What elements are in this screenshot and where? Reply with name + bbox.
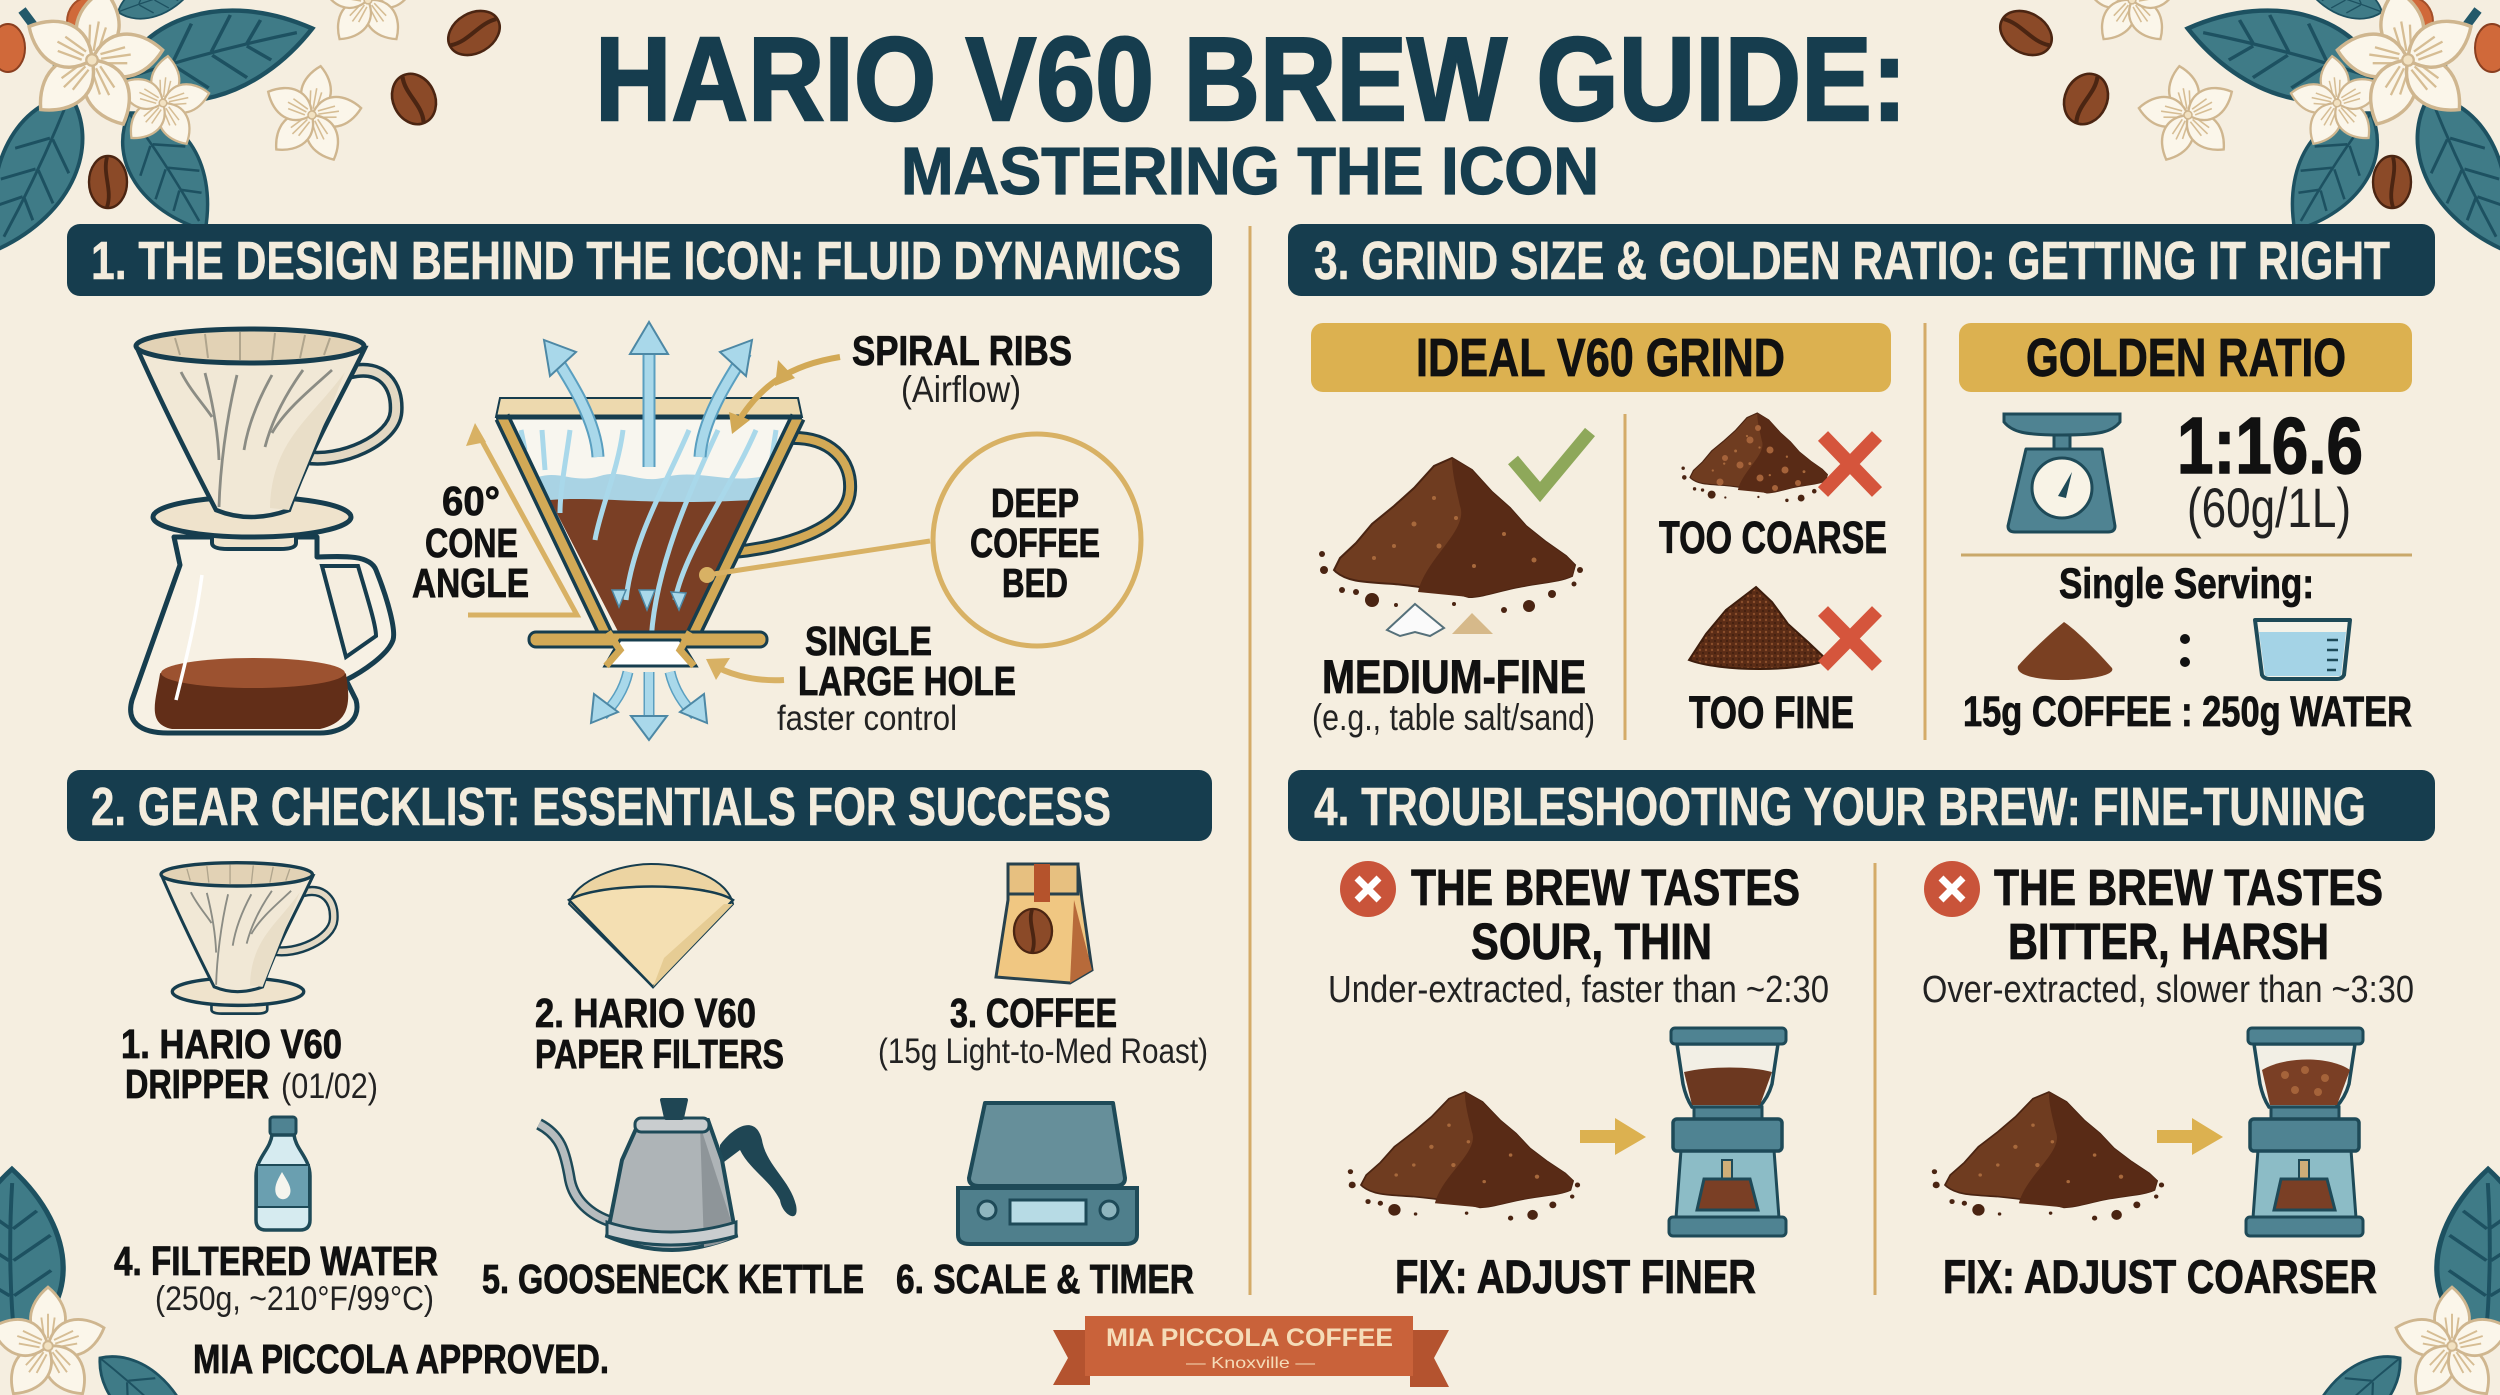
problem: bitter and harsh bbox=[1922, 859, 2414, 1303]
decoration: top-right coffee branch bbox=[1992, 0, 2500, 265]
gear: dripper bbox=[121, 863, 378, 1107]
ribbon: brand badge bbox=[1053, 1316, 1449, 1387]
panel: grind size and golden ratio bbox=[1288, 224, 2435, 740]
problem: sour and thin: FIX: ADJUST FINER bbox=[1395, 1250, 1756, 1303]
callout: deep coffee bed: BED bbox=[1002, 560, 1068, 606]
callout: 60 degree cone angle bbox=[412, 423, 577, 615]
ribbon: brand badge: — Knoxville — bbox=[1186, 1355, 1315, 1372]
subheading: golden ratio: GOLDEN RATIO bbox=[2026, 328, 2346, 388]
text: single serving bbox=[1963, 560, 2412, 736]
text: approved note: MIA PICCOLA APPROVED. bbox=[193, 1336, 609, 1382]
callout: 60 degree cone angle: ANGLE bbox=[412, 560, 529, 606]
stat: ratio bbox=[2177, 401, 2363, 539]
grind: medium-fine: (e.g., table salt/sand) bbox=[1312, 697, 1595, 738]
callout: 60 degree cone angle: 60° bbox=[442, 478, 500, 524]
heading bar: section 1 bbox=[67, 224, 1212, 296]
gear: coffee bag bbox=[878, 864, 1208, 1071]
heading bar: section 1: 1. THE DESIGN BEHIND THE ICON: FLUID DYNAMICS bbox=[91, 231, 1181, 291]
stat: ratio: 1:16.6 bbox=[2177, 401, 2363, 490]
panel: troubleshooting bbox=[1288, 770, 2435, 1303]
gear: dripper: (01/02) bbox=[281, 1067, 378, 1106]
diagram: V60 cross-section bbox=[496, 322, 850, 740]
problem: sour and thin: Under-extracted, faster than ~2:30 bbox=[1328, 969, 1829, 1011]
callout: spiral ribs: SPIRAL RIBS bbox=[852, 327, 1072, 374]
icon: balance scale bbox=[2004, 414, 2120, 532]
title: HARIO V60 BREW GUIDE: bbox=[595, 13, 1907, 146]
decoration: bottom-left coffee branch bbox=[0, 1168, 214, 1395]
gear: gooseneck kettle: 5. GOOSENECK KETTLE bbox=[482, 1256, 864, 1302]
grind: too coarse bbox=[1659, 413, 1887, 563]
gear: dripper: 1. HARIO V60 bbox=[121, 1021, 342, 1067]
gear: gooseneck kettle bbox=[482, 1100, 864, 1302]
grind: medium-fine: MEDIUM-FINE bbox=[1322, 650, 1586, 703]
decoration: bottom-right coffee branch bbox=[2286, 1168, 2500, 1395]
callout: single large hole: SINGLE bbox=[805, 618, 932, 664]
subheading: ideal grind: IDEAL V60 GRIND bbox=[1416, 328, 1785, 388]
gear: coffee bag: (15g Light-to-Med Roast) bbox=[878, 1032, 1208, 1071]
text: single serving: Single Serving: bbox=[2059, 560, 2314, 608]
gear: paper filters: 2. HARIO V60 bbox=[535, 990, 756, 1036]
problem: sour and thin: SOUR, THIN bbox=[1471, 913, 1712, 970]
gear: dripper: DRIPPER bbox=[125, 1061, 269, 1107]
gear: filtered water: (250g, ~210°F/99°C) bbox=[155, 1280, 434, 1318]
heading bar: section 2: 2. GEAR CHECKLIST: ESSENTIALS FOR SUCCESS bbox=[91, 777, 1111, 837]
grind: medium-fine bbox=[1312, 432, 1595, 738]
gear: coffee bag: 3. COFFEE bbox=[950, 990, 1117, 1036]
icon: dripper on server bbox=[131, 329, 396, 733]
gear: paper filters bbox=[535, 864, 784, 1077]
callout: spiral ribs bbox=[729, 327, 1072, 434]
stat: ratio: (60g/1L) bbox=[2187, 476, 2351, 539]
problem: bitter and harsh: BITTER, HARSH bbox=[2008, 913, 2329, 970]
problem: bitter and harsh: THE BREW TASTES bbox=[1994, 859, 2383, 916]
panel: design behind the icon bbox=[67, 224, 1212, 740]
decoration: top-left coffee branch bbox=[0, 0, 508, 265]
callout: deep coffee bed: COFFEE bbox=[970, 520, 1100, 566]
gear: filtered water: 4. FILTERED WATER bbox=[114, 1238, 438, 1284]
grind: too fine: TOO FINE bbox=[1689, 687, 1854, 738]
problem: sour and thin: THE BREW TASTES bbox=[1411, 859, 1800, 916]
callout: deep coffee bed bbox=[699, 434, 1141, 646]
subtitle: MASTERING THE ICON bbox=[901, 134, 1599, 209]
gear: filtered water bbox=[114, 1117, 438, 1318]
callout: 60 degree cone angle: CONE bbox=[425, 520, 518, 566]
gear: paper filters: PAPER FILTERS bbox=[535, 1031, 784, 1077]
callout: deep coffee bed: DEEP bbox=[991, 480, 1079, 526]
ribbon: brand badge: MIA PICCOLA COFFEE bbox=[1106, 1324, 1393, 1352]
problem: bitter and harsh: Over-extracted, slower than ~3:30 bbox=[1922, 969, 2414, 1011]
problem: bitter and harsh: FIX: ADJUST COARSER bbox=[1943, 1250, 2377, 1303]
gear: scale and timer bbox=[896, 1103, 1194, 1302]
callout: single large hole bbox=[706, 618, 1016, 738]
problem: sour and thin bbox=[1328, 859, 1829, 1303]
gear: scale and timer: 6. SCALE & TIMER bbox=[896, 1256, 1194, 1302]
callout: single large hole: faster control bbox=[777, 699, 957, 738]
panel: gear checklist bbox=[67, 770, 1212, 1382]
callout: single large hole: LARGE HOLE bbox=[798, 658, 1016, 704]
grind: too coarse: TOO COARSE bbox=[1659, 512, 1887, 563]
callout: spiral ribs: (Airflow) bbox=[901, 369, 1021, 410]
subheading: ideal grind bbox=[1311, 323, 1891, 392]
grind: too fine bbox=[1689, 587, 1877, 738]
